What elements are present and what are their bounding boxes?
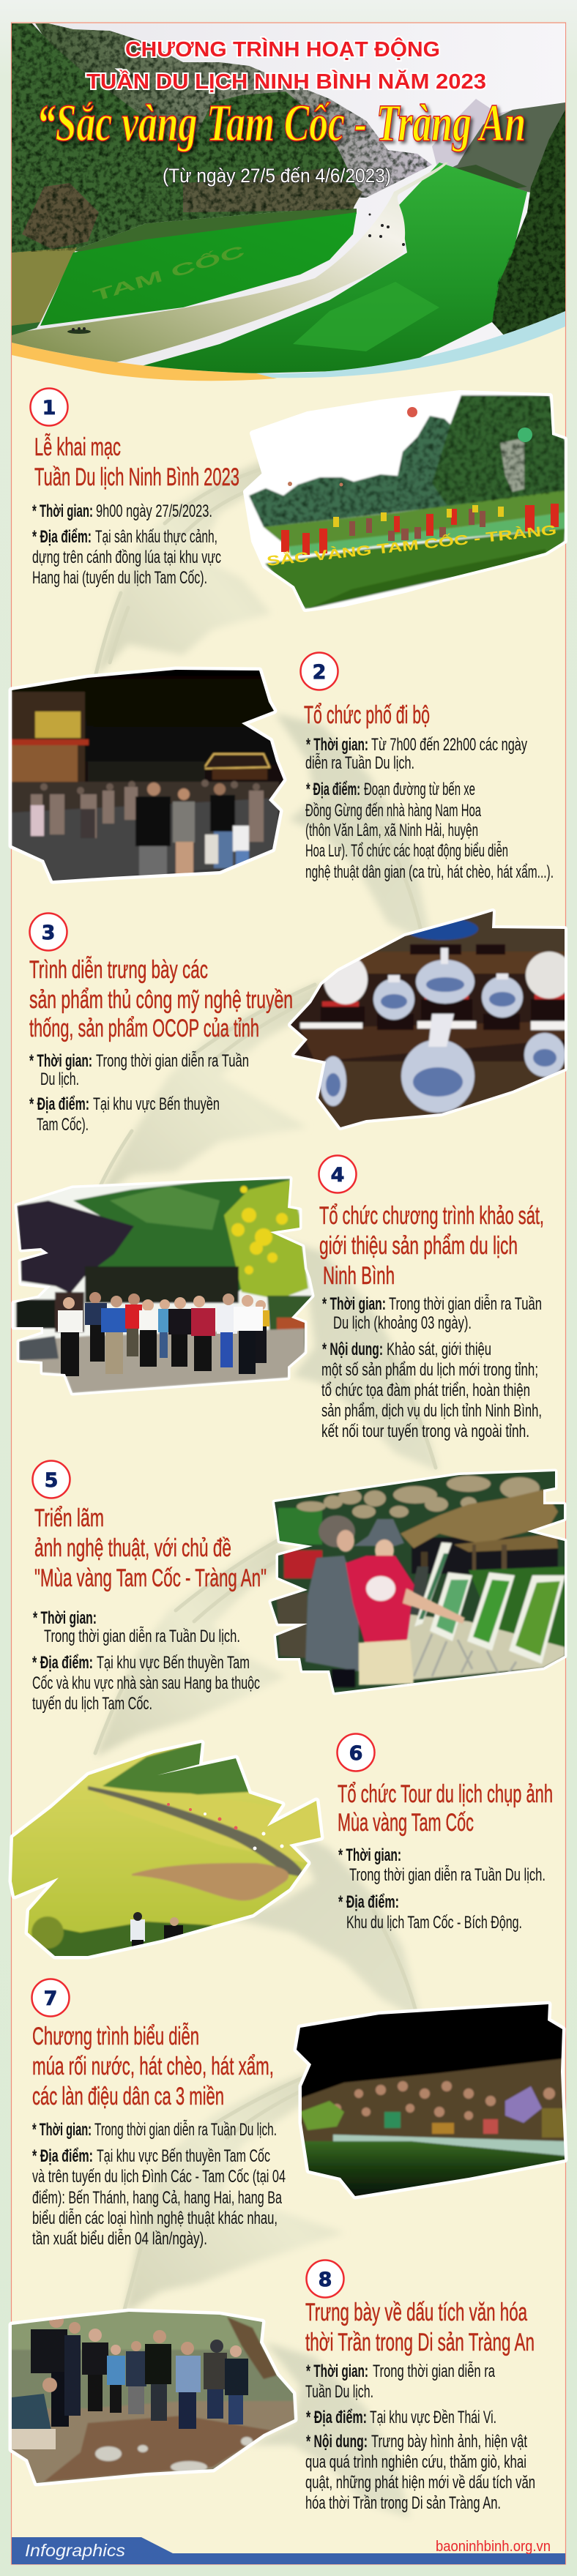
heading 7: các làn điệu dân ca 3 miền bbox=[32, 2083, 224, 2110]
text block 7: * Thời gian: bbox=[32, 2120, 92, 2140]
badge 6 bbox=[337, 1733, 375, 1772]
text block 3: Du lịch. bbox=[40, 1069, 79, 1089]
photo 1: opening stage: SẮC VÀNG TAM CỐC - TRÀNG bbox=[266, 522, 557, 570]
photo 5: art exhibition bbox=[271, 1468, 567, 1695]
badge 3: 3 bbox=[42, 922, 55, 944]
date line: (Từ ngày 27/5 đến 4/6/2023) bbox=[163, 165, 391, 187]
badge 2: 2 bbox=[313, 661, 326, 684]
text block 5: Trong thời gian diễn ra Tuần Du lịch. bbox=[44, 1627, 240, 1646]
panel: section 2 bbox=[12, 653, 554, 882]
header banner photo and titles bbox=[12, 15, 565, 381]
panel: section 7 bbox=[32, 1979, 567, 2249]
heading 7 bbox=[32, 2023, 274, 2110]
heading 2: Tổ chức phố đi bộ bbox=[304, 701, 430, 729]
badge 2 bbox=[300, 653, 338, 690]
text block 8 bbox=[305, 2362, 535, 2513]
heading 1: Lễ khai mạc bbox=[34, 433, 121, 461]
text block 1: * Thời gian: bbox=[32, 501, 93, 521]
text block 4: * Thời gian: bbox=[322, 1294, 386, 1314]
text block 3 bbox=[29, 1051, 249, 1135]
heading 8 bbox=[305, 2299, 535, 2356]
text block 3: Tại khu vực Bến thuyền bbox=[93, 1094, 220, 1114]
text block 6: * Thời gian: bbox=[338, 1845, 401, 1865]
heading line 2: TUẦN DU LỊCH NINH BÌNH NĂM 2023 bbox=[86, 69, 486, 94]
text block 2: diễn ra Tuần Du lịch. bbox=[305, 753, 414, 773]
heading line 1: CHƯƠNG TRÌNH HOẠT ĐỘNG bbox=[125, 37, 440, 61]
text block 8: Tuần Du lịch. bbox=[305, 2382, 373, 2402]
text block 2 bbox=[305, 735, 554, 882]
decorative arcs under banner bbox=[12, 310, 565, 381]
text block 2: (thôn Văn Lâm, xã Ninh Hải, huyện bbox=[305, 821, 478, 840]
badge 6: 6 bbox=[349, 1742, 362, 1765]
text block 5: Tại khu vực Bến thuyền Tam bbox=[97, 1653, 250, 1673]
two visitors bbox=[305, 1515, 465, 1687]
text block 8: * Địa điểm: bbox=[306, 2408, 367, 2427]
text block 3: Tam Cốc). bbox=[37, 1115, 89, 1135]
text block 4: * Nội dung: bbox=[322, 1340, 383, 1359]
heading 7: Chương trình biểu diễn bbox=[32, 2023, 199, 2050]
text block 4: Du lịch (khoảng 03 ngày). bbox=[333, 1313, 472, 1333]
badge 8 bbox=[306, 2260, 344, 2297]
text block 5: Cốc và khu vực nhà sàn sau Hang ba thuộc bbox=[32, 1673, 260, 1693]
badge 8: 8 bbox=[319, 2269, 332, 2291]
text block 6 bbox=[338, 1845, 546, 1933]
text block 5: tuyến du lịch Tam Cốc. bbox=[32, 1694, 152, 1714]
badge 1: 1 bbox=[42, 397, 56, 419]
text block 7: và trên tuyến du lịch Đình Các - Tam Cốc (tại 04 bbox=[32, 2167, 286, 2187]
text block 7: điểm): Bến Thánh, hang Cả, hang Hai, hang Ba bbox=[32, 2188, 282, 2208]
panel: section 5 bbox=[32, 1461, 567, 1714]
badge 4 bbox=[319, 1155, 356, 1193]
text block 1: Tại sân khấu thực cảnh, bbox=[95, 527, 217, 547]
photo 6: golden rice landscape bbox=[7, 1739, 330, 1965]
text block 4: Khảo sát, giới thiệu bbox=[387, 1340, 491, 1359]
photo 7: water puppet audience at night bbox=[293, 1998, 567, 2211]
heading 3: thống, sản phẩm OCOP của tỉnh bbox=[29, 1015, 259, 1042]
heading 5: Triển lãm bbox=[34, 1504, 104, 1532]
text block 3: Trong thời gian diễn ra Tuần bbox=[96, 1051, 249, 1071]
heading 5: ảnh nghệ thuật, với chủ đề bbox=[34, 1534, 231, 1562]
text block 1: * Địa điểm: bbox=[32, 527, 92, 547]
photo 3: ceramic vases bbox=[286, 908, 573, 1131]
foreground couple bbox=[147, 783, 160, 796]
panel: section 3 bbox=[29, 908, 573, 1135]
text block 2: Đoạn đường từ bến xe bbox=[364, 780, 475, 799]
text block 3: * Thời gian: bbox=[29, 1051, 92, 1071]
text block 5: * Địa điểm: bbox=[32, 1653, 93, 1673]
photo 8: archaeological site bbox=[7, 2306, 300, 2489]
text block 7: Tại khu vực Bến thuyền Tam Cốc bbox=[97, 2146, 270, 2166]
heading 3 bbox=[29, 956, 293, 1042]
heading 1 bbox=[34, 433, 239, 491]
photo: rice fields and river bbox=[12, 15, 565, 377]
heading 7: múa rối nước, hát chèo, hát xẩm, bbox=[32, 2053, 274, 2080]
footer band bbox=[12, 2537, 565, 2564]
text block 2: * Địa điểm: bbox=[306, 780, 360, 799]
field lettering: TAM CỐC bbox=[91, 241, 247, 305]
source: baoninhbinh.org.vn bbox=[436, 2539, 551, 2555]
text block 1 bbox=[32, 501, 221, 588]
heading 5 bbox=[34, 1504, 267, 1592]
badge 5: 5 bbox=[45, 1469, 58, 1492]
text block 1: Hang hai (tuyến du lịch Tam Cốc). bbox=[32, 568, 207, 588]
text block 1: 9h00 ngày 27/5/2023. bbox=[96, 501, 212, 521]
text block 7: Trong thời gian diễn ra Tuần Du lịch. bbox=[94, 2120, 277, 2140]
panel: section 6 bbox=[7, 1733, 553, 1965]
text block 2: * Thời gian: bbox=[306, 735, 368, 755]
heading 1: Tuần Du lịch Ninh Bình 2023 bbox=[34, 463, 239, 491]
badge 1 bbox=[31, 388, 67, 426]
text block 8: Trong thời gian diễn ra bbox=[373, 2362, 495, 2381]
badge 7: 7 bbox=[44, 1987, 57, 2010]
group of people bbox=[58, 1292, 269, 1376]
panel: section 4 bbox=[12, 1155, 544, 1441]
badge 3 bbox=[29, 914, 67, 950]
standing group bbox=[12, 2313, 248, 2449]
badge 7 bbox=[32, 1979, 69, 2016]
text block 5 bbox=[32, 1608, 260, 1714]
text block 5: * Thời gian: bbox=[33, 1608, 97, 1628]
easels and paintings bbox=[414, 1542, 565, 1664]
photo 4: survey delegation bbox=[12, 1171, 316, 1405]
text block 7: tần xuất biểu diễn 04 lần/ngày). bbox=[32, 2229, 207, 2249]
text block 1: dựng trên cánh đồng lúa tại khu vực bbox=[32, 548, 221, 567]
heading 4 bbox=[319, 1202, 544, 1290]
text block 3: * Địa điểm: bbox=[29, 1094, 89, 1114]
badge 5 bbox=[32, 1461, 70, 1498]
heading 6: Mùa vàng Tam Cốc bbox=[338, 1809, 474, 1837]
text block 6: * Địa điểm: bbox=[338, 1892, 399, 1912]
heading 5: "Mùa vàng Tam Cốc - Tràng An" bbox=[34, 1564, 267, 1592]
footer label: Infographics bbox=[25, 2541, 126, 2560]
panel: section 8 bbox=[7, 2260, 535, 2513]
badge 4: 4 bbox=[331, 1164, 344, 1187]
heading 6 bbox=[338, 1780, 553, 1837]
heading 3: Trình diễn trưng bày các bbox=[29, 956, 208, 984]
text block 4 bbox=[321, 1294, 542, 1441]
photo 2: walking street at night bbox=[12, 662, 290, 882]
text block 7 bbox=[32, 2120, 286, 2249]
photo 1: opening stage bbox=[242, 388, 567, 615]
heading 4: Ninh Bình bbox=[323, 1262, 395, 1290]
heading 3: sản phẩm thủ công mỹ nghệ truyền bbox=[29, 986, 293, 1014]
text block 8: * Nội dung: bbox=[306, 2432, 368, 2452]
text block 8: * Thời gian: bbox=[306, 2362, 368, 2381]
text block 8: Tại khu vực Đền Thái Vi. bbox=[370, 2408, 496, 2427]
panel: section 1 bbox=[31, 388, 567, 615]
text block 7: * Địa điểm: bbox=[32, 2146, 93, 2166]
text block 7: biểu diễn các loại hình nghệ thuật khác nhau, bbox=[32, 2209, 278, 2228]
